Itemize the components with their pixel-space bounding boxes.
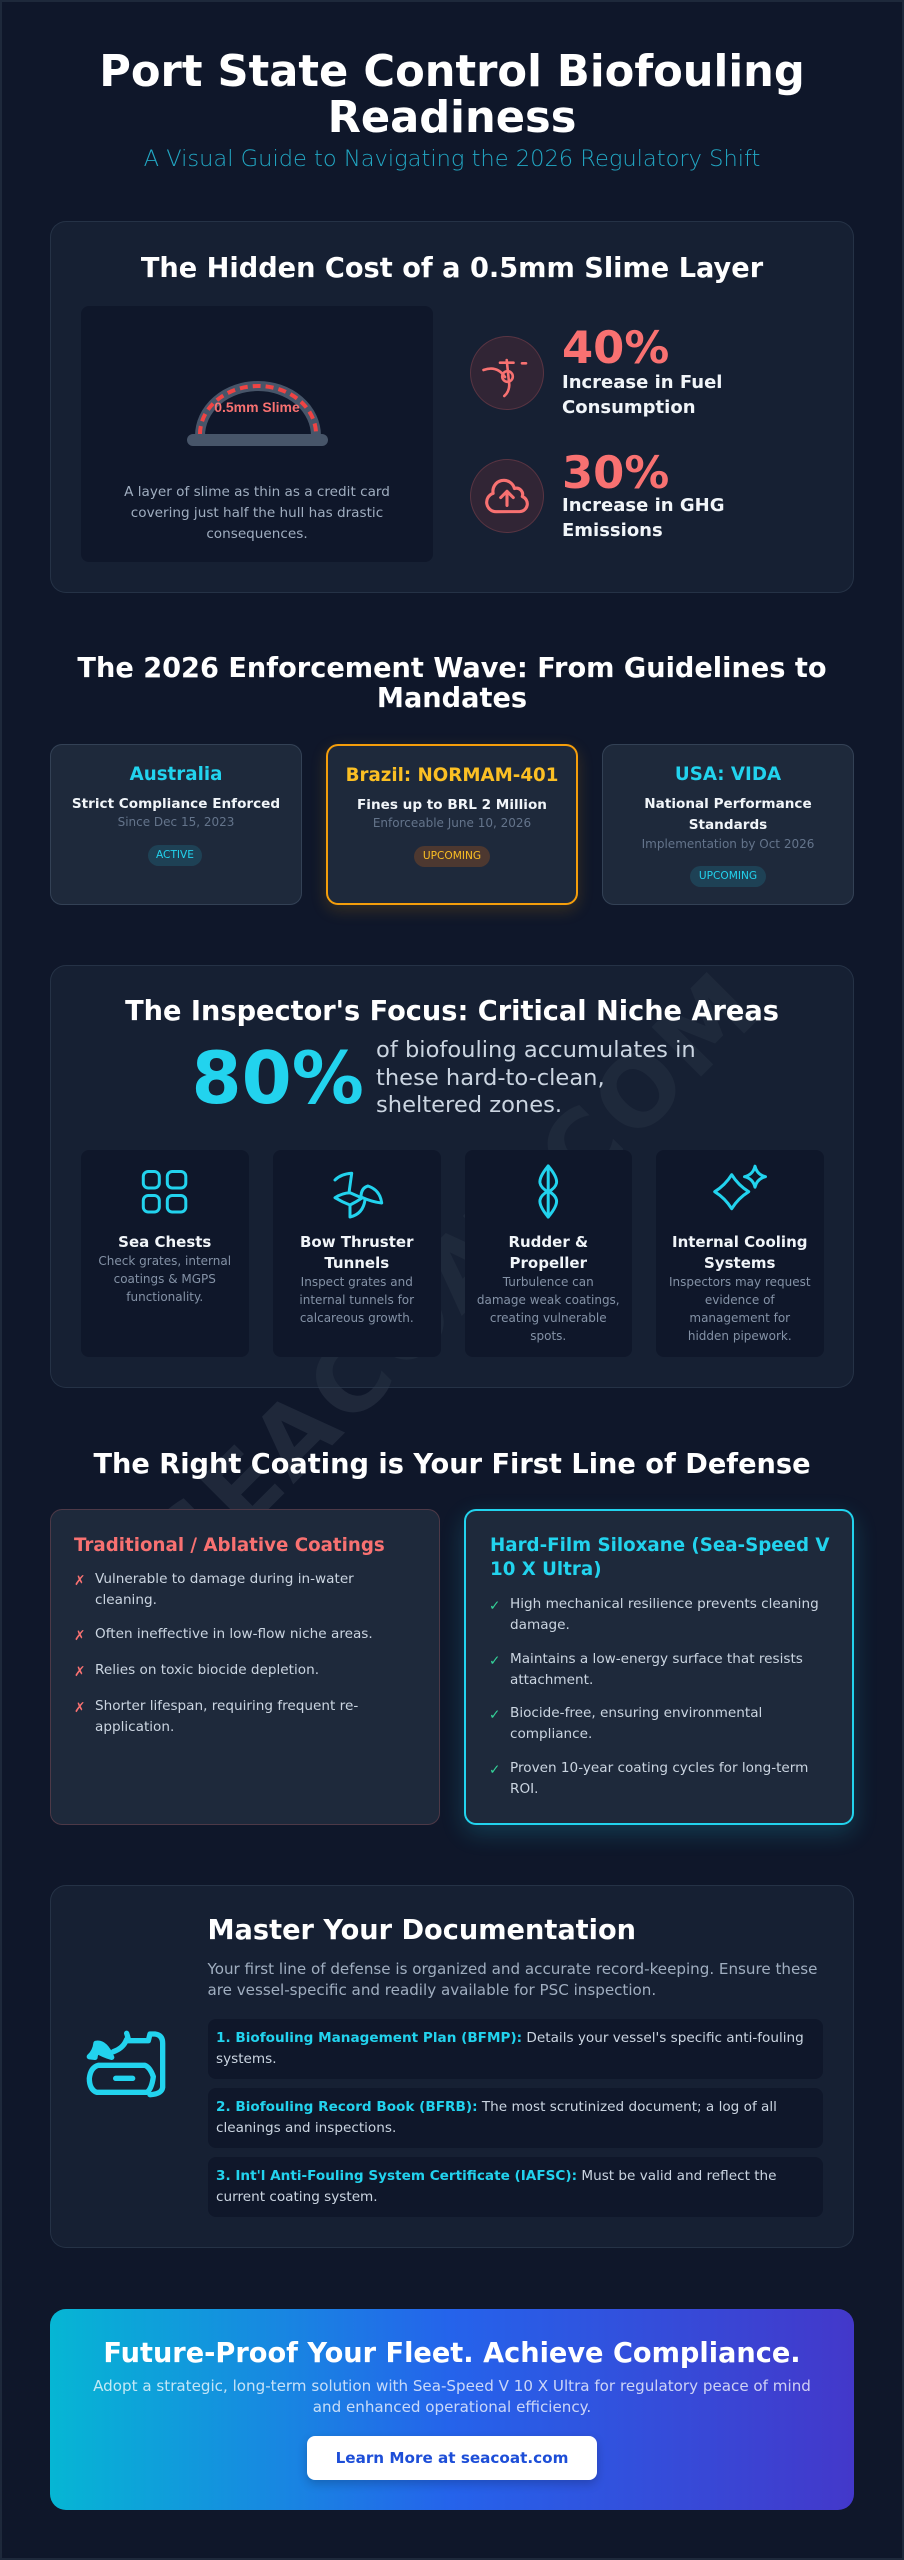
heading: enforcement wave: The 2026 Enforcement Wave: From Guidelines to xyxy=(77,653,827,684)
niche description: management for xyxy=(689,1311,790,1325)
panel title: Traditional / Ablative Coatings xyxy=(74,1534,385,1556)
niche description: Check grates, internal xyxy=(98,1254,231,1268)
document item 1 xyxy=(208,2019,823,2079)
CTA button: Learn More at seacoat.com xyxy=(336,2448,568,2466)
niche title xyxy=(300,1232,414,1272)
list item: application. xyxy=(95,1719,174,1735)
check mark: ✓ xyxy=(489,1707,500,1723)
document item 3: 3. Int'l Anti-Fouling System Certificate (IAFSC): Must be valid and reflect the xyxy=(216,2168,777,2184)
card: Australia xyxy=(50,744,302,905)
cross mark: ✗ xyxy=(74,1628,85,1644)
badge: upcoming xyxy=(414,846,490,866)
card subtitle xyxy=(644,796,812,832)
heading: coating: The Right Coating is Your First Line of Defense xyxy=(93,1448,811,1480)
card date: Since Dec 15, 2023 xyxy=(118,815,234,829)
niche description: creating vulnerable xyxy=(490,1311,607,1325)
panel: siloxane coating xyxy=(464,1509,854,1825)
title: Port State Control Biofouling xyxy=(99,47,805,97)
title xyxy=(99,47,805,143)
slime caption: consequences. xyxy=(206,526,308,542)
list item: cleaning. xyxy=(95,1592,157,1608)
slime caption: A layer of slime as thin as a credit card xyxy=(124,484,390,500)
CTA heading: Future-Proof Your Fleet. Achieve Compliance. xyxy=(103,2338,801,2369)
document item 1: 1. Biofouling Management Plan (BFMP): Details your vessel's specific anti-fouling xyxy=(216,2030,804,2046)
niche description xyxy=(669,1275,811,1343)
list item: Shorter lifespan, requiring frequent re- xyxy=(95,1698,358,1714)
document item 3 xyxy=(208,2157,823,2217)
badge: upcoming: UPCOMING xyxy=(699,870,757,882)
panel title xyxy=(490,1535,830,1580)
list item: High mechanical resilience prevents cleaning xyxy=(510,1596,819,1612)
check mark: ✓ xyxy=(489,1598,500,1614)
card title: Brazil: Brazil: NORMAM-401 xyxy=(346,765,558,786)
card subtitle: National Performance xyxy=(644,796,812,812)
icon: cloud upload xyxy=(470,459,544,533)
card title: USA: USA: VIDA xyxy=(675,764,781,785)
panel: niche areas xyxy=(50,965,854,1388)
niche card: cooling xyxy=(656,1150,824,1357)
niche title xyxy=(508,1232,588,1272)
document item 2 xyxy=(208,2088,823,2148)
card date: Enforceable June 10, 2026 xyxy=(373,816,531,830)
card: Brazil xyxy=(326,744,578,905)
watermark: SEACOAT.COM xyxy=(128,949,782,1603)
panel title: 10 X Ultra) xyxy=(490,1559,602,1580)
list item xyxy=(510,1596,819,1633)
list item: Relies on toxic biocide depletion. xyxy=(95,1662,319,1678)
badge: active xyxy=(148,844,202,866)
niche description xyxy=(299,1275,414,1325)
niche description xyxy=(98,1254,231,1304)
niche description: evidence of xyxy=(705,1293,775,1307)
niche title: Internal Cooling xyxy=(672,1232,807,1250)
icon: sparkles xyxy=(713,1164,767,1210)
intro paragraph: Your first line of defense is organized and accurate record-keeping. Ensure these xyxy=(208,1960,817,1978)
niche description: Inspectors may request xyxy=(669,1275,811,1289)
niche description: Turbulence can xyxy=(503,1275,594,1289)
list item: Maintains a low-energy surface that resists xyxy=(510,1650,803,1666)
icon: rudder and propeller xyxy=(538,1164,558,1219)
list item: damage. xyxy=(510,1617,570,1633)
CTA paragraph: and enhanced operational efficiency. xyxy=(313,2398,591,2416)
niche description: functionality. xyxy=(126,1290,203,1304)
list item xyxy=(95,1571,354,1608)
document item 2: cleanings and inspections. xyxy=(216,2120,396,2136)
niche description: hidden pipework. xyxy=(688,1329,792,1343)
icon: fuel xyxy=(470,336,544,410)
hull illustration box xyxy=(81,306,433,562)
icon: bow thruster xyxy=(333,1172,384,1218)
stat label: fuel: Increase in Fuel xyxy=(562,372,722,393)
list item: ROI. xyxy=(510,1780,538,1796)
cross mark: ✗ xyxy=(74,1573,85,1589)
stat label: fuel xyxy=(562,372,722,418)
niche card: rudder xyxy=(464,1150,632,1357)
niche title: Rudder & xyxy=(508,1232,588,1250)
card subtitle: Strict Compliance Enforced xyxy=(72,796,280,812)
document item 1: systems. xyxy=(216,2050,277,2066)
intro paragraph: are vessel-specific and readily available for PSC inspection. xyxy=(208,1980,656,1998)
niche title: Propeller xyxy=(510,1254,587,1272)
stat label: GHG xyxy=(562,495,724,540)
list item xyxy=(510,1650,803,1688)
niche title xyxy=(672,1232,807,1272)
card date: Implementation by Oct 2026 xyxy=(642,837,814,851)
stat description: these hard-to-clean, xyxy=(376,1064,605,1090)
panel title: Hard-Film Siloxane (Sea-Speed V xyxy=(490,1535,830,1556)
niche title: Sea Chests xyxy=(118,1232,211,1250)
cross mark: ✗ xyxy=(74,1700,85,1716)
icon: hull with slime layer: 0.5mm Slime xyxy=(214,399,300,415)
list item: attachment. xyxy=(510,1672,593,1688)
niche title: Systems xyxy=(704,1254,775,1272)
stat label: GHG: Emissions xyxy=(562,520,663,540)
list item: Biocide-free, ensuring environmental xyxy=(510,1705,762,1721)
badge: upcoming xyxy=(690,866,766,886)
stat description: of biofouling accumulates in xyxy=(376,1037,696,1063)
badge: upcoming: UPCOMING xyxy=(423,850,481,862)
niche description: calcareous growth. xyxy=(300,1311,414,1325)
list item: Often ineffective in low-flow niche areas. xyxy=(95,1626,373,1642)
list: drawbacks xyxy=(74,1571,373,1735)
panel: documentation xyxy=(50,1885,854,2248)
niche description xyxy=(477,1275,620,1343)
list: benefits xyxy=(489,1596,819,1796)
niche description: damage weak coatings, xyxy=(477,1293,620,1307)
card subtitle: Standards xyxy=(689,816,767,832)
list item xyxy=(510,1760,808,1796)
CTA button xyxy=(307,2436,597,2480)
check mark: ✓ xyxy=(489,1762,500,1778)
card: USA xyxy=(602,744,854,905)
CTA paragraph: Adopt a strategic, long-term solution with Sea-Speed V 10 X Ultra for regulatory peace of mind xyxy=(93,2376,811,2394)
intro paragraph xyxy=(208,1960,817,1998)
card title: Australia: Australia xyxy=(130,764,222,785)
stat description: sheltered zones. xyxy=(376,1092,562,1118)
CTA paragraph xyxy=(93,2376,811,2416)
icon: sea chests xyxy=(142,1170,188,1214)
section: enforcement wave xyxy=(50,653,854,916)
niche description: internal tunnels for xyxy=(299,1293,414,1307)
icon: hull with slime layer xyxy=(187,381,328,446)
document item 3: current coating system. xyxy=(216,2188,378,2204)
niche title: Tunnels xyxy=(324,1254,389,1272)
panel: call to action xyxy=(50,2309,854,2510)
cross mark: ✗ xyxy=(74,1664,85,1680)
stat: 80%: 80% xyxy=(192,1036,364,1120)
panel: traditional coatings xyxy=(50,1509,440,1825)
stat description xyxy=(376,1037,696,1118)
icon: document xyxy=(86,2030,166,2098)
heading: enforcement wave xyxy=(77,653,827,714)
panel: hidden cost xyxy=(50,221,854,593)
heading: hidden cost: The Hidden Cost of a 0.5mm Slime Layer xyxy=(141,252,763,284)
badge: active: ACTIVE xyxy=(156,848,194,860)
stat label: fuel: Consumption xyxy=(562,396,696,418)
card subtitle: Fines up to BRL 2 Million xyxy=(357,796,547,812)
niche description: Inspect grates and xyxy=(301,1275,413,1289)
stat label: GHG: Increase in GHG xyxy=(562,495,724,516)
niche description: spots. xyxy=(530,1329,566,1343)
document item 2: 2. Biofouling Record Book (BFRB): The most scrutinized document; a log of all xyxy=(216,2098,777,2114)
heading: niche areas: The Inspector's Focus: Critical Niche Areas xyxy=(125,996,779,1027)
slime caption: covering just half the hull has drastic xyxy=(131,504,383,520)
subtitle: A Visual Guide to Navigating the 2026 Regulatory Shift xyxy=(144,146,760,172)
stat: 40%: 40% xyxy=(562,321,669,374)
title: Readiness xyxy=(328,93,576,143)
check mark: ✓ xyxy=(489,1652,500,1668)
niche description: coatings & MGPS xyxy=(114,1272,216,1286)
niche card: bow thruster xyxy=(273,1150,440,1357)
list item: Proven 10-year coating cycles for long-term xyxy=(510,1760,808,1776)
list item: Vulnerable to damage during in-water xyxy=(95,1571,354,1587)
list item xyxy=(95,1698,358,1735)
list item xyxy=(510,1705,762,1742)
niche card: sea chests xyxy=(81,1150,248,1357)
niche title: Bow Thruster xyxy=(300,1232,413,1250)
list item: compliance. xyxy=(510,1726,592,1742)
stat: 30%: 30% xyxy=(562,446,669,499)
slime caption xyxy=(124,484,390,542)
heading: documentation: Master Your Documentation xyxy=(208,1915,636,1946)
heading: enforcement wave: Mandates xyxy=(377,683,527,714)
